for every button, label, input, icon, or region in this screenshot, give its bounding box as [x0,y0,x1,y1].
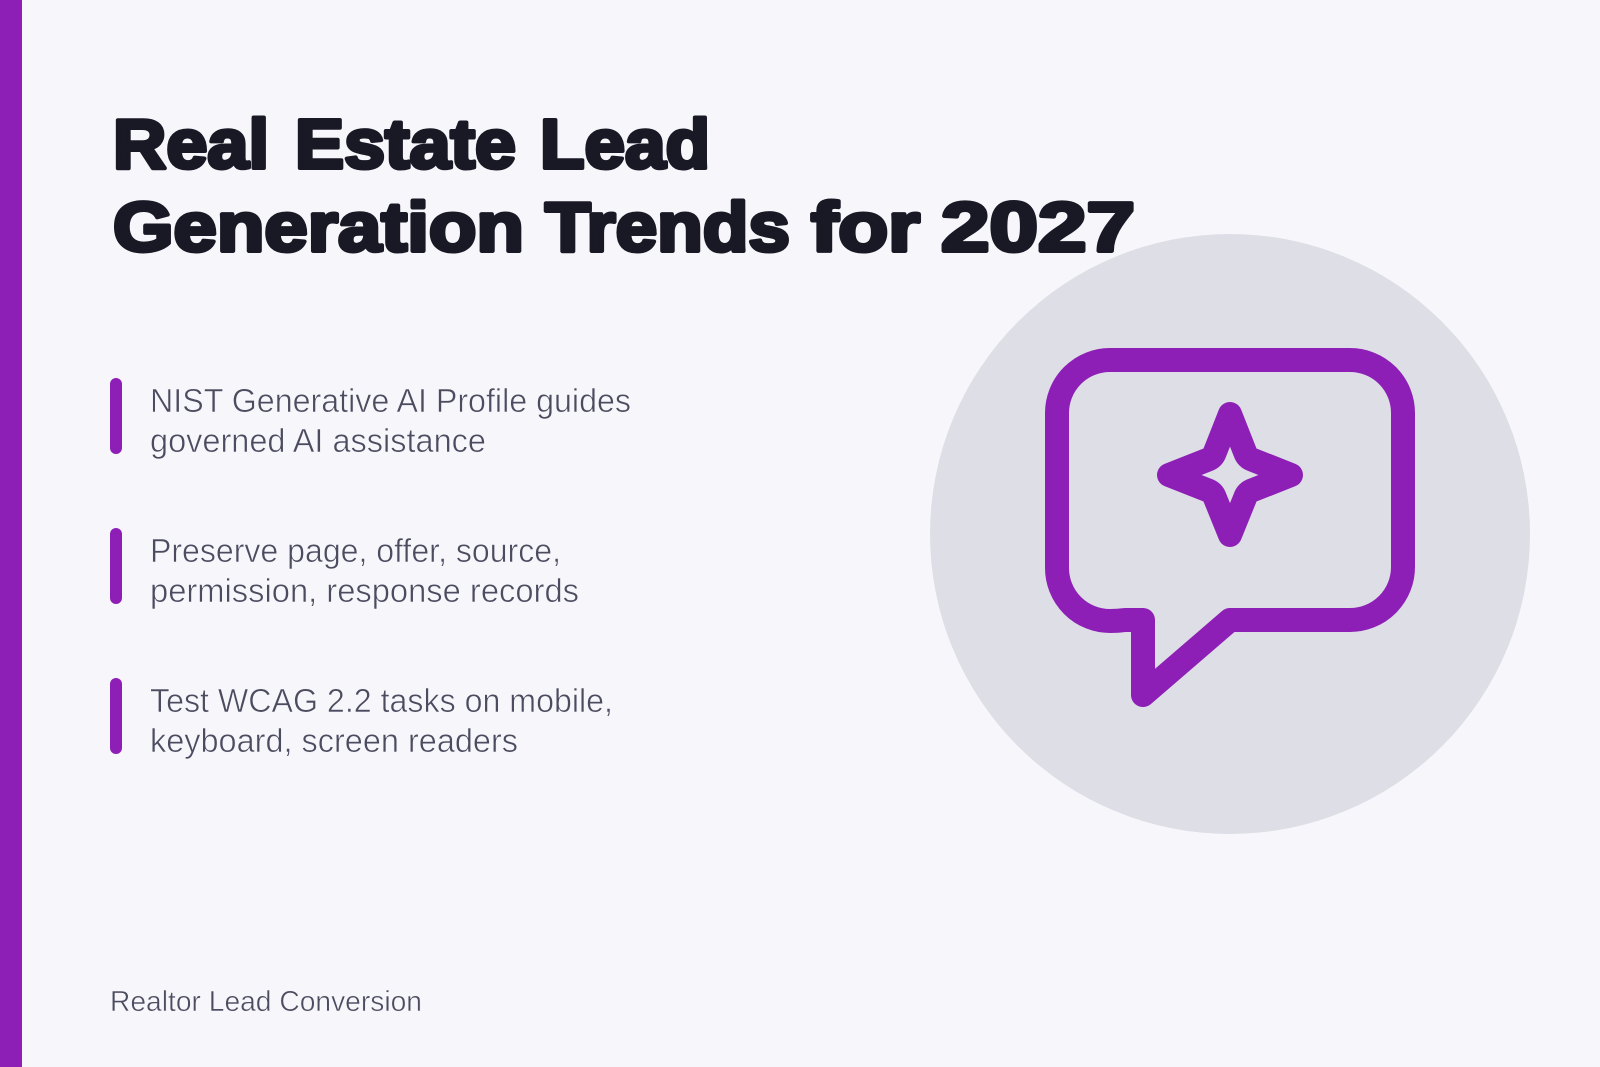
bullet 2 text: Preserve page, offer, source, [150,532,561,569]
bullet 3 marker [110,678,122,754]
icon: speech bubble outline [1057,360,1403,695]
bullet 1 text: NIST Generative AI Profile guides [150,382,631,419]
bullet 1 marker [110,378,122,454]
title: Real [113,105,269,183]
icon: speech bubble with sparkle [1057,360,1403,695]
title: 2027 [941,188,1135,266]
bullet 3 text: Test WCAG 2.2 tasks on mobile, [150,682,613,719]
bullet 1 text [150,382,631,459]
title: for [811,188,920,266]
illustration circle [930,234,1530,834]
icon: sparkle [1169,414,1291,535]
title: Lead [540,105,710,183]
bullet 3 text: keyboard, screen readers [150,722,518,759]
bullet 1 text: governed AI assistance [150,422,486,459]
title [113,105,1135,266]
bullet 2 text: permission, response records [150,572,579,609]
bullet 1 [110,378,631,459]
bullet 2 text [150,532,579,609]
left accent bar [0,0,22,1067]
bullet 3 [110,678,613,759]
title: Generation [113,188,524,266]
title: Estate [295,105,516,183]
bullet 2 [110,528,579,609]
bullet 2 marker [110,528,122,604]
bullet 3 text [150,682,613,759]
title: Trends [545,188,790,266]
footer label: Realtor Lead Conversion [110,986,422,1018]
